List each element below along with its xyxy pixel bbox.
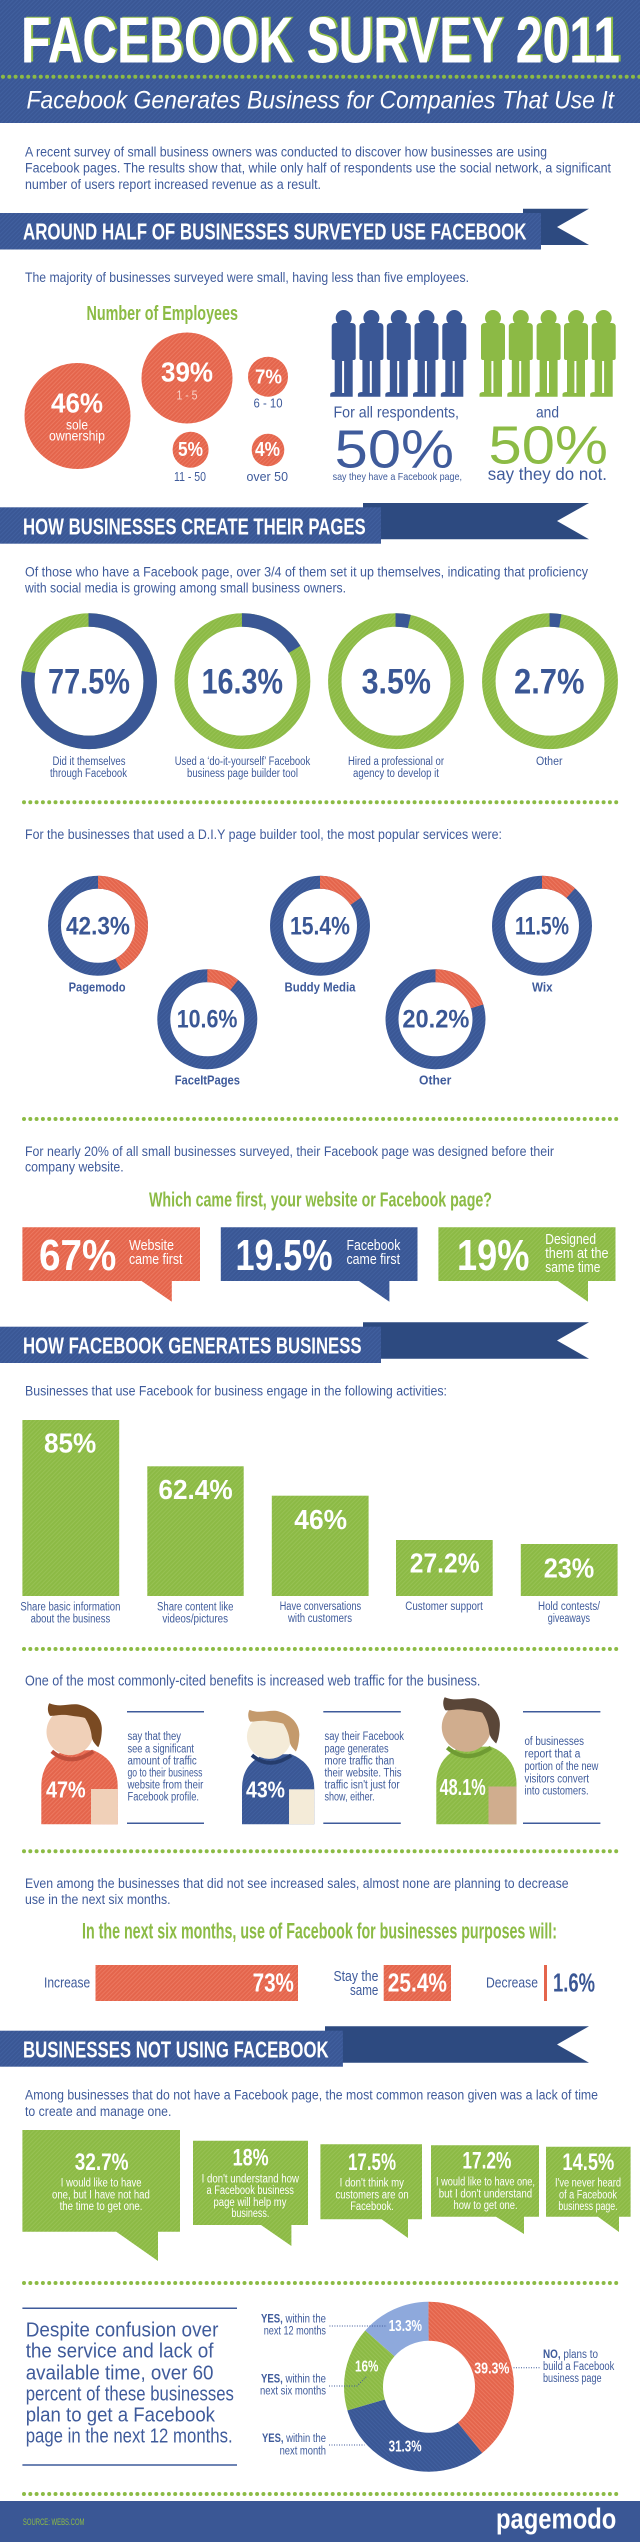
icon: five green people: [480, 310, 616, 397]
stat: 50 percent do not: say they do not.: [488, 464, 607, 484]
subtitle: Facebook Generates Business for Companies That Use It: [26, 87, 615, 114]
legend: no plans: [543, 2349, 614, 2385]
text: 48.1 percent description: report that a: [524, 1749, 581, 1761]
heading: number of employees: Number of Employees: [86, 302, 238, 325]
bubble: 4 percent over 50: over 50: [246, 469, 288, 484]
callout: website came first: 67%: [39, 1231, 116, 1280]
callout: 14.5 percent: I've never heard: [555, 2178, 621, 2190]
legend: yes within next month: next month: [280, 2445, 326, 2457]
bar: 46 percent: Have conversations: [280, 1601, 361, 1613]
ring: 16.3 percent: Used a ‘do-it-yourself’ Facebook: [175, 756, 310, 768]
intro paragraph: number of users report increased revenue as a result.: [25, 177, 321, 192]
callout: facebook came first: came first: [346, 1252, 400, 1268]
text: nearly 20 percent: For nearly 20% of all small businesses surveyed, their Facebook page was designed before their: [25, 1144, 554, 1159]
text: 43 percent description: traffic isn't just for: [324, 1780, 400, 1792]
bubble: 5 percent 11-50: [173, 432, 209, 484]
legend: yes within six months: [260, 2374, 326, 2398]
ring: 16.3 percent: 16.3%: [202, 662, 283, 701]
figure: 43 percent person: 43%: [246, 1776, 285, 1802]
stat: 50 percent have a page: [333, 405, 462, 483]
text: activities intro: Businesses that use Facebook for business engage in the following activities:: [25, 1384, 447, 1399]
text: 47 percent description: [127, 1712, 204, 1823]
bubble: 4 percent over 50: [246, 434, 288, 484]
ring: FaceItPages: [164, 976, 251, 1087]
text: over three quarters: [24, 565, 588, 596]
bubble: 5 percent 11-50: 11 - 50: [174, 469, 206, 484]
footer: [0, 2501, 640, 2542]
ring: 2.7 percent: [489, 620, 611, 768]
section banner: how facebook generates business: [0, 1322, 589, 1363]
ring: Pagemodo: Pagemodo: [69, 980, 126, 995]
bar: stay the same: same: [350, 1983, 378, 1999]
stat: 50 percent have a page: 50%: [335, 419, 454, 479]
legend: yes within six months: YES, within the: [261, 2374, 326, 2386]
callout: facebook came first: 19.5%: [236, 1231, 333, 1280]
callout: 14.5 percent: business page.: [558, 2201, 618, 2213]
bar: 23 percent: [521, 1544, 618, 1625]
intro paragraph: [25, 145, 611, 192]
bubble: 39 percent 1-5: 1 - 5: [176, 387, 198, 402]
stat: 50 percent do not: 50%: [488, 415, 608, 475]
bubble: 46 percent sole ownership: sole: [66, 417, 88, 432]
intro paragraph: A recent survey of small business owners was conducted to discover how businesses are using: [25, 145, 547, 160]
text: 43 percent description: page generates: [324, 1744, 389, 1756]
bar: stay the same: [334, 1965, 451, 2001]
ring: 16.3 percent: business page builder tool: [187, 768, 298, 780]
bar: 85 percent: [20, 1420, 120, 1626]
bar: 62.4 percent: 62.4%: [158, 1474, 233, 1505]
text block: despite confusion: the service and lack of: [26, 2341, 214, 2363]
text: 43 percent description: say their Facebook: [324, 1731, 404, 1743]
text: 43 percent description: [323, 1712, 404, 1823]
ring: Other: 20.2%: [402, 1005, 469, 1033]
callout: 14.5 percent: 14.5%: [562, 2149, 614, 2176]
ring: Buddy Media: Buddy Media: [284, 980, 356, 995]
text: 48.1 percent description: into customers.: [524, 1785, 589, 1797]
figure: 47 percent person: 47%: [46, 1776, 86, 1802]
callout: 17.5 percent: customers are on: [336, 2190, 409, 2202]
bar: 27.2 percent: 27.2%: [410, 1548, 480, 1579]
chart: plans donut: 16%: [355, 2359, 379, 2376]
section banner: around half: [0, 209, 589, 250]
header banner: [0, 0, 640, 123]
callout: same time: [438, 1227, 616, 1302]
text block: despite confusion: page in the next 12 months.: [26, 2426, 233, 2448]
bar: 27.2 percent: Customer support: [405, 1601, 484, 1613]
ring: Pagemodo: 42.3%: [66, 912, 130, 940]
callout: 17.5 percent: 17.5%: [348, 2149, 396, 2176]
ring: Pagemodo: [54, 882, 142, 995]
section banner: businesses not using facebook: BUSINESSES NOT USING FACEBOOK: [23, 2036, 329, 2062]
text: 47 percent description: website from their: [127, 1780, 203, 1792]
callout: same time: Designed: [545, 1232, 596, 1248]
callout: same time: same time: [545, 1260, 600, 1276]
stat: 50 percent have a page: For all respondents,: [334, 405, 459, 422]
callout: 32.7 percent: [22, 2130, 180, 2261]
text block: despite confusion: available time, over 60: [26, 2362, 214, 2384]
text: 47 percent description: amount of traffic: [128, 1756, 197, 1768]
logo: pagemodo: pagemodo: [496, 2503, 616, 2535]
bubble: 46 percent sole ownership: [24, 363, 130, 469]
callout: 32.7 percent: one, but I have not had: [52, 2189, 150, 2201]
callout: 17.5 percent: I don't think my: [340, 2178, 404, 2190]
chart: page builder service rings: [54, 882, 586, 1087]
text: 48.1 percent description: visitors convert: [524, 1773, 590, 1785]
ring: 2.7 percent: Other: [536, 756, 563, 768]
section banner: how facebook generates business: HOW FACEBOOK GENERATES BUSINESS: [23, 1332, 362, 1358]
callout: 18 percent: I don't understand how: [202, 2173, 300, 2185]
legend: yes within 12 months: next 12 months: [264, 2326, 326, 2338]
chart: page creation rings: [28, 620, 611, 780]
bar: 85 percent: about the business: [31, 1614, 110, 1626]
figure: 48.1 percent person: [436, 1697, 517, 1824]
bubble: 7 percent 6-10: 6 - 10: [254, 396, 282, 411]
ring: Wix: [498, 882, 586, 995]
bar: decrease: Decrease: [486, 1975, 538, 1991]
bar: increase: [44, 1965, 298, 2001]
ring: 77.5 percent: Did it themselves: [52, 756, 126, 768]
text: 48.1 percent description: [523, 1712, 600, 1823]
bar: decrease: 1.6%: [553, 1968, 595, 1998]
chart: plans donut: 39.3%: [474, 2360, 510, 2377]
text block: despite confusion: [22, 2308, 237, 2465]
bar: 62.4 percent: Share content like: [157, 1601, 234, 1613]
callout: 18 percent: [193, 2141, 308, 2246]
chart: use next six months: [44, 1965, 595, 2001]
bubble: 46 percent sole ownership: 46%: [51, 388, 103, 419]
stat: 50 percent do not: [488, 405, 608, 484]
chart: plans donut: 31.3%: [389, 2439, 422, 2456]
callout: 14.5 percent: of a Facebook: [559, 2190, 617, 2202]
ring: Buddy Media: 15.4%: [290, 912, 350, 940]
bubble: 4 percent over 50: 4%: [255, 439, 280, 461]
chart: activities bars: [20, 1420, 618, 1626]
text: majority of businesses: The majority of businesses surveyed were small, having less than five employees.: [25, 270, 469, 285]
bar: 46 percent: 46%: [294, 1504, 347, 1535]
ring: 77.5 percent: 77.5%: [48, 662, 130, 701]
ring: 3.5 percent: [335, 620, 457, 780]
text: not decreasing use: use in the next six months.: [25, 1892, 171, 1907]
panel: respondents split: [330, 310, 616, 484]
bar: 85 percent: 85%: [44, 1428, 96, 1459]
text: web traffic benefit: One of the most commonly-cited benefits is increased web traffic for the business.: [25, 1673, 480, 1690]
callout: 14.5 percent: [546, 2147, 631, 2232]
callout: website came first: came first: [129, 1252, 182, 1268]
text: over three quarters: with social media is growing among small business owners.: [24, 581, 346, 596]
panel: number of employees: [24, 302, 288, 484]
ring: 3.5 percent: Hired a professional or: [348, 756, 444, 768]
text: nearly 20 percent: [25, 1144, 554, 1175]
ring: FaceItPages: FaceItPages: [175, 1072, 240, 1087]
bar: 23 percent: giveaways: [548, 1613, 590, 1625]
callout: 17.2 percent: [431, 2145, 539, 2234]
callout: 17.5 percent: [320, 2144, 422, 2238]
ring: 16.3 percent: [175, 620, 310, 780]
chart: plans donut: 13.3%: [389, 2318, 422, 2335]
text block: despite confusion: Despite confusion over: [26, 2320, 219, 2342]
text: popular services: For the businesses that used a D.I.Y page builder tool, the most popular services were:: [25, 827, 502, 842]
callout: 17.2 percent: I would like to have one,: [436, 2177, 535, 2189]
callout: 18 percent: a Facebook business: [206, 2185, 294, 2197]
text: over three quarters: Of those who have a Facebook page, over 3/4 of them set it up themselves, indicating that proficiency: [25, 565, 588, 580]
text: lack of time: to create and manage one.: [25, 2104, 171, 2119]
callout: 18 percent: page will help my: [214, 2197, 287, 2209]
bubble: 39 percent 1-5: [142, 332, 232, 424]
bar: 46 percent: [272, 1496, 369, 1625]
bar: 62.4 percent: [147, 1466, 244, 1626]
callout: 32.7 percent: the time to get one.: [60, 2201, 142, 2213]
legend: yes within six months: next six months: [260, 2386, 326, 2398]
callout: 18 percent: business.: [231, 2208, 269, 2220]
bubble: 5 percent 11-50: 5%: [178, 439, 203, 461]
stat: 50 percent have a page: say they have a Facebook page,: [333, 471, 462, 483]
text: 47 percent description: Facebook profile.: [128, 1792, 199, 1804]
legend: yes within 12 months: YES, within the: [261, 2313, 326, 2325]
ring: Wix: 11.5%: [515, 912, 569, 940]
text: not decreasing use: [25, 1876, 569, 1907]
text: nearly 20 percent: company website.: [25, 1160, 124, 1175]
ring: 2.7 percent: 2.7%: [514, 662, 584, 701]
icon: five blue people: [330, 310, 466, 397]
bar: 23 percent: 23%: [544, 1552, 594, 1583]
text: 47 percent description: see a significant: [128, 1744, 195, 1756]
bar: 23 percent: Hold contests/: [538, 1601, 601, 1613]
source: SOURCE: WEBS.COM: [23, 2517, 85, 2528]
callout: website came first: Website: [129, 1238, 174, 1254]
bar: stay the same: 25.4%: [388, 1968, 447, 1998]
ring: 77.5 percent: through Facebook: [50, 768, 127, 780]
bubble: 7 percent 6-10: [248, 357, 288, 411]
ring: 3.5 percent: 3.5%: [362, 662, 431, 701]
callout: 18 percent: 18%: [233, 2145, 269, 2172]
callout: same time: them at the: [545, 1246, 609, 1262]
text: 47 percent description: say that they: [128, 1731, 181, 1743]
callout: 32.7 percent: I would like to have: [61, 2178, 142, 2190]
legend: no plans: business page: [543, 2373, 602, 2385]
text block: despite confusion: plan to get a Facebook: [26, 2405, 216, 2427]
bar: stay the same: Stay the: [334, 1969, 378, 1985]
text block: despite confusion: percent of these businesses: [26, 2384, 234, 2406]
stat: 50 percent do not: and: [536, 405, 559, 422]
text: lack of time: Among businesses that do not have a Facebook page, the most common reason given was a lack of time: [25, 2087, 598, 2102]
section banner: businesses not using facebook: [0, 2026, 589, 2067]
callout: 32.7 percent: 32.7%: [75, 2149, 129, 2176]
callout: facebook came first: [221, 1227, 418, 1302]
bar: 27.2 percent: [396, 1540, 493, 1613]
bar: 85 percent: Share basic information: [20, 1601, 120, 1613]
ring: Other: [392, 976, 479, 1087]
text: not decreasing use: Even among the businesses that did not see increased sales, almost none are planning to decrease: [25, 1876, 569, 1891]
bubble: 46 percent sole ownership: ownership: [49, 429, 105, 444]
figure: 47 percent person: [41, 1703, 118, 1824]
bubble: 39 percent 1-5: 39%: [161, 357, 213, 388]
callout: 17.2 percent: 17.2%: [462, 2148, 511, 2175]
ring: Other: Other: [419, 1072, 451, 1087]
legend: yes within next month: [262, 2433, 326, 2457]
bar: increase: 73%: [253, 1968, 294, 1998]
bar: decrease: [486, 1965, 595, 2001]
callout: 17.2 percent: but I don't understand: [439, 2188, 532, 2200]
text: 48.1 percent description: of businesses: [524, 1736, 584, 1748]
text: 43 percent description: more traffic than: [324, 1756, 394, 1768]
text: lack of time: [25, 2087, 598, 2119]
ring: FaceItPages: 10.6%: [177, 1005, 238, 1033]
ring: 3.5 percent: agency to develop it: [353, 768, 440, 780]
ring: Wix: Wix: [532, 980, 553, 995]
callout: same time: 19%: [457, 1231, 529, 1280]
figure: 48.1 percent person: 48.1%: [440, 1774, 486, 1800]
ring: 77.5 percent: [28, 620, 150, 780]
text: 47 percent description: go to their business: [128, 1768, 203, 1780]
legend: no plans: NO, plans to: [543, 2349, 598, 2361]
callout: 17.5 percent: Facebook.: [350, 2201, 394, 2213]
ring: Buddy Media: [276, 882, 364, 995]
text: 43 percent description: their website. This: [324, 1768, 402, 1780]
legend: no plans: build a Facebook: [543, 2361, 614, 2373]
callout: facebook came first: Facebook: [346, 1238, 401, 1254]
figure: 43 percent person: [242, 1710, 314, 1824]
bar: increase: Increase: [44, 1975, 90, 1991]
bar: 46 percent: with customers: [287, 1613, 352, 1625]
chart: plans donut: [260, 2313, 614, 2457]
section banner: how businesses create pages: HOW BUSINESSES CREATE THEIR PAGES: [23, 513, 366, 539]
bar: 62.4 percent: videos/pictures: [162, 1614, 228, 1626]
legend: yes within next month: YES, within the: [262, 2433, 326, 2445]
text: 43 percent description: show, either.: [324, 1792, 375, 1804]
heading: which came first: Which came first, your website or Facebook page?: [149, 1190, 492, 1212]
legend: yes within 12 months: [261, 2313, 326, 2338]
callout: website came first: [22, 1227, 200, 1302]
callout: 17.2 percent: how to get one.: [454, 2200, 518, 2212]
section banner: how businesses create pages: [0, 503, 589, 544]
text: 48.1 percent description: portion of the new: [524, 1761, 599, 1773]
bubble: 7 percent 6-10: 7%: [255, 366, 282, 388]
